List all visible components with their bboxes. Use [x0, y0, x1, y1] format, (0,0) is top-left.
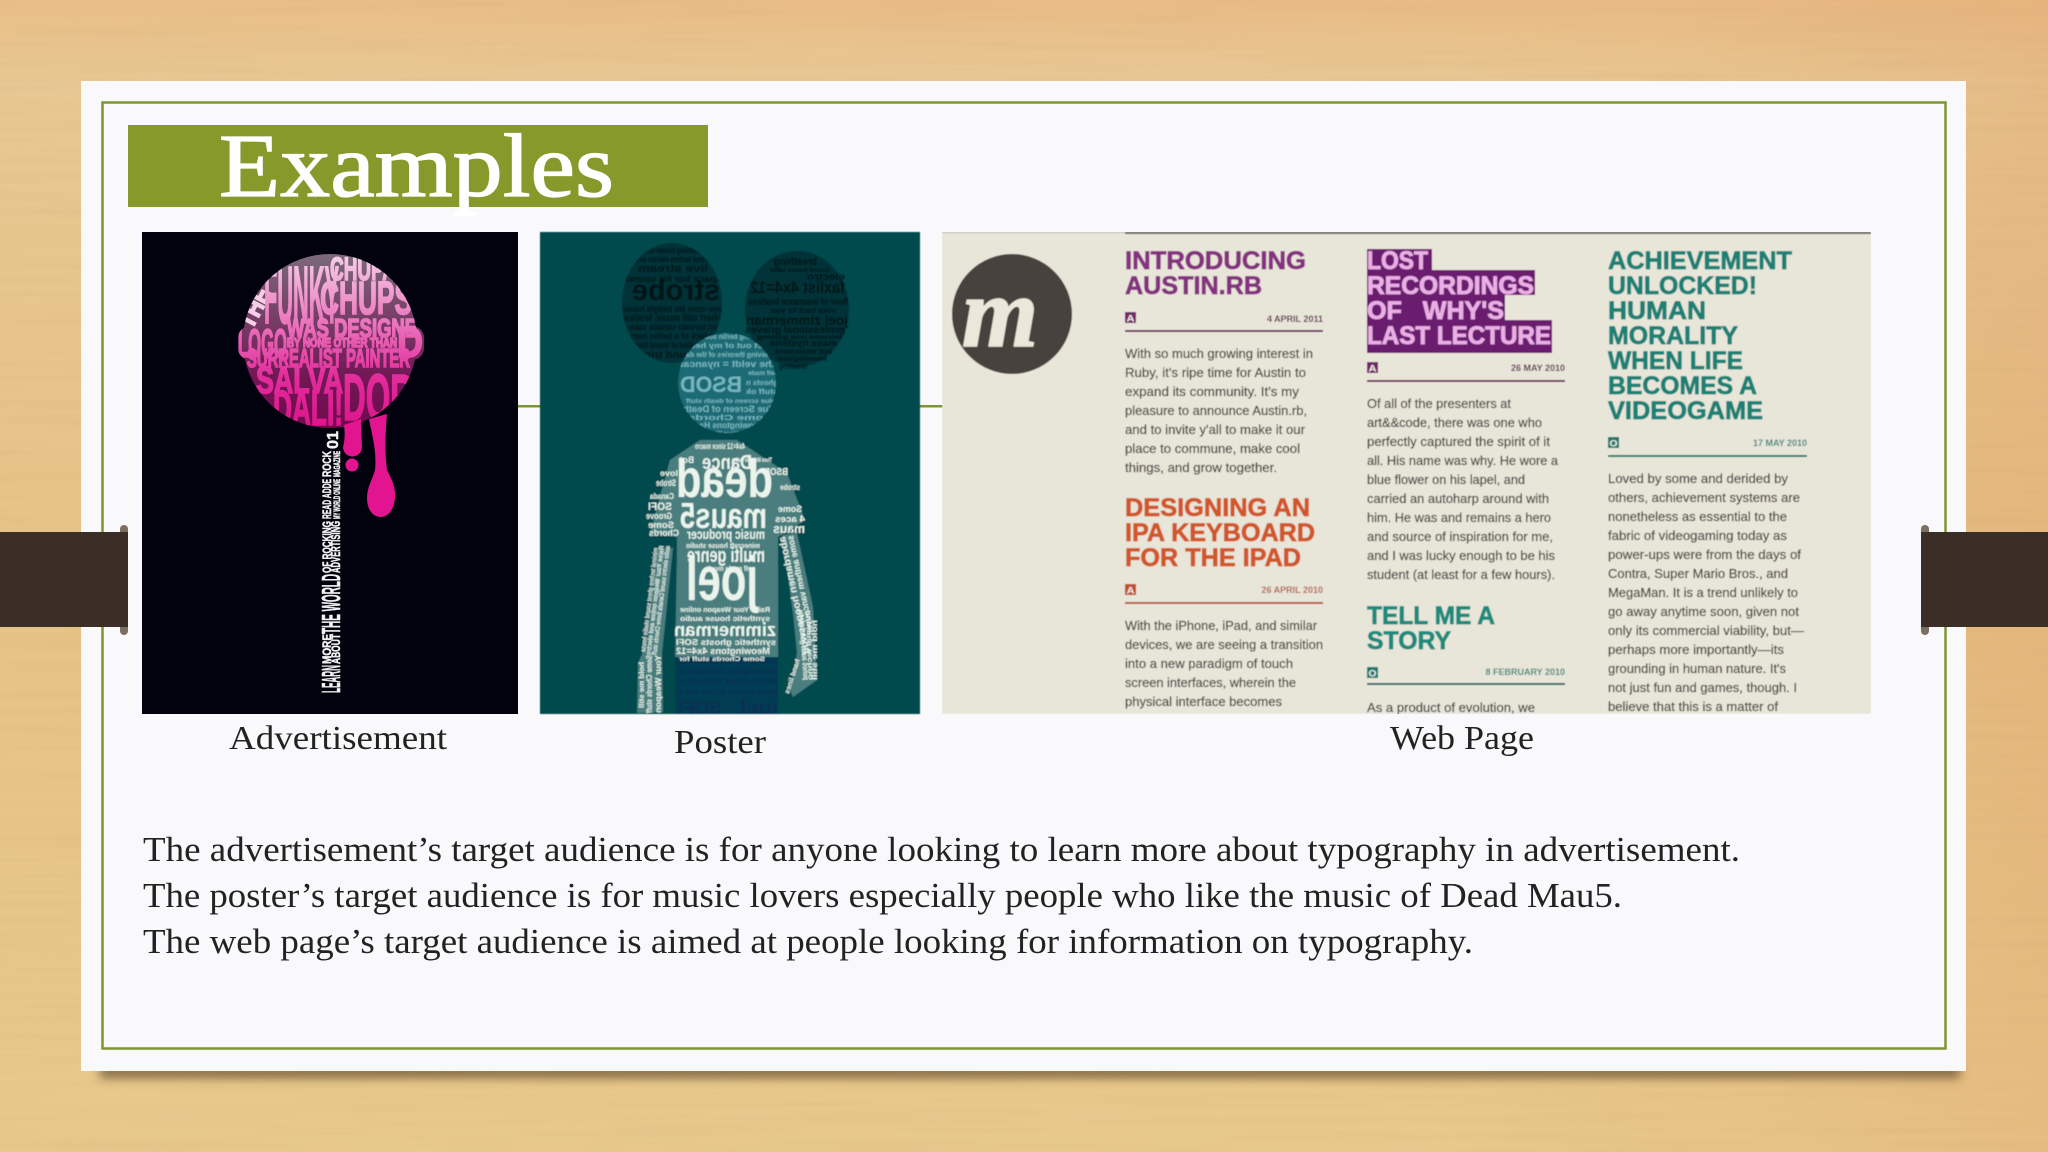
torso lettering: There Might Be Coffee: [732, 458, 772, 464]
column 1: Introducing Austin.rb: AUSTIN.RB: [1125, 272, 1262, 300]
column 3: Achievement unlocked: MORALITY: [1608, 322, 1738, 350]
torso lettering: Meowingtons 4x4=12: [676, 646, 770, 656]
torso lettering: BSOD: [764, 467, 788, 478]
column 1: Introducing Austin.rb: pleasure to announce Austin.rb,: [1125, 403, 1307, 418]
caption: advertisement: Advertisement: [229, 720, 448, 757]
torso lettering: Some Chords stuff for: [678, 657, 765, 663]
legs lettering: some chords strobe maus: [678, 686, 778, 696]
column 2: Lost recordings: blue flower on his lapel, and: [1367, 472, 1525, 487]
title: [128, 117, 708, 216]
head: moving theories of the day: [682, 352, 772, 359]
legs lettering: Meowingtons professional: [678, 666, 778, 676]
column 2: Lost recordings: 26 MAY 2010: [1511, 363, 1565, 373]
left ear: >hert still music festival: [622, 313, 722, 324]
right ear: mass hysteria: [769, 338, 837, 348]
column 3: Achievement unlocked: MegaMan. It is a trend unlikely to: [1608, 585, 1798, 600]
legs lettering: [676, 658, 778, 714]
column 1: Designing an IPA keyboard: [1125, 494, 1323, 709]
head: Some Chords: [688, 415, 772, 422]
green frame: [102, 102, 1946, 1048]
torso lettering: self made music: [705, 566, 755, 573]
lollipop stick lettering: ABOUT: [329, 634, 343, 664]
lollipop head lettering: CHUPA: [330, 251, 396, 287]
caption: poster: Poster: [674, 724, 767, 761]
sleeves and arms lettering: hoopes wolf some sound: [796, 610, 810, 680]
legs lettering: SOFI: [678, 698, 722, 718]
sleeves and arms lettering: audio electro sound Canada Some Chords stuff: [652, 545, 672, 656]
torso lettering: maus5: [680, 495, 767, 536]
caption: web page: Web Page: [1390, 720, 1534, 757]
column 1: Designing an IPA keyboard: FOR THE IPAD: [1125, 544, 1301, 572]
head: Blue Screen of Death: [683, 404, 778, 414]
legs lettering: some sound steps deadmau5: [678, 656, 778, 666]
sleeves and arms lettering: Your Weapon: [654, 655, 663, 713]
column 3: Achievement unlocked: WHEN LIFE: [1608, 347, 1743, 375]
column 2: Lost recordings: perfectly captured the spirit of it: [1367, 434, 1550, 449]
sleeves and arms lettering: minimal techno ghost sound studio house: [640, 547, 660, 653]
right ear: become one gaming: [757, 335, 842, 341]
column 3: Achievement unlocked: perhaps more importantly—its: [1608, 642, 1784, 657]
column 3: Achievement unlocked: not just fun and games, though. I: [1608, 680, 1797, 695]
head: blue screen of death stuff: [685, 399, 776, 405]
lollipop head lettering: DOR: [343, 360, 413, 434]
column 2: Tell me a story: TELL ME A: [1367, 602, 1495, 630]
connector line behind images: [510, 405, 950, 408]
paint drips: [343, 414, 395, 517]
column 3: Achievement unlocked: [1608, 247, 1807, 714]
sleeves and arms lettering: hold me still: [639, 662, 646, 708]
column 1: Designing an IPA keyboard: devices, we are seeing a transition: [1125, 637, 1323, 652]
right ear: professional grieves: [745, 325, 845, 336]
sleeves and arms lettering: some anthem vancouver: [785, 535, 816, 635]
column 2: Lost recordings: [1367, 247, 1565, 582]
left ear: space bar hit sound: [626, 274, 722, 284]
column 1: Introducing Austin.rb: With so much growing interest in: [1125, 346, 1313, 361]
description text: [143, 830, 1740, 961]
torso lettering: 4x4=12 since macro: [695, 442, 745, 451]
right dark tab: [1921, 525, 2048, 635]
column 2: Lost recordings: and source of inspiration for me,: [1367, 529, 1553, 544]
column 2: Lost recordings: him. He was and remains a hero: [1367, 510, 1551, 525]
torso lettering: Raise Your Weapon online: [680, 607, 770, 614]
column 2: Lost recordings: RECORDINGS: [1367, 272, 1534, 300]
column 1: Designing an IPA keyboard: 26 APRIL 2010: [1261, 585, 1323, 595]
sleeves and arms lettering: Some: [778, 504, 802, 514]
column 2: Lost recordings: LOST: [1367, 247, 1428, 275]
white slide panel: [81, 81, 1966, 1071]
lollipop head lettering: [238, 254, 424, 428]
right ear: joel zimmerman: [746, 312, 849, 328]
left dark tab: [0, 525, 128, 635]
description text: The web page’s target audience is aimed at people looking for information on typography.: [143, 922, 1473, 961]
lollipop stick lettering: MY WORLD ONLINE: [332, 479, 342, 519]
left ear: for lack of a better name: [626, 331, 720, 341]
torso lettering: synthetic house audio: [680, 616, 770, 623]
sleeves and arms lettering: hold me still: [812, 620, 819, 680]
column 1: Designing an IPA keyboard: physical interface becomes: [1125, 694, 1282, 709]
column 1: Introducing Austin.rb: A: [1126, 314, 1135, 324]
left ear: girl toronto canada stance: [622, 322, 720, 332]
sleeves and arms lettering: Groove: [646, 511, 672, 521]
right ear: floor of insurance beatless: [748, 297, 848, 308]
column 3: Achievement unlocked: only its commercial viability, but—: [1608, 623, 1804, 638]
column 1: Introducing Austin.rb: expand its community. It's my: [1125, 384, 1300, 399]
panel: web page: [942, 232, 1871, 715]
lollipop stick lettering: ADVERTISING: [328, 521, 343, 573]
column 3: Achievement unlocked: others, achievement systems are: [1608, 490, 1800, 505]
title: Examples: [219, 117, 614, 216]
sleeves and arms lettering: 4 aces: [775, 514, 805, 524]
lollipop head lettering: SURREALIST PAINTER: [247, 343, 410, 373]
column 3: Achievement unlocked: BECOMES A: [1608, 372, 1757, 400]
right ear: Meowingtons: [777, 356, 827, 363]
column 3: Achievement unlocked: 17 MAY 2010: [1753, 438, 1807, 448]
lollipop head lettering: D: [397, 318, 423, 367]
sleeves and arms lettering: Raise Your Weapon online and electro: [646, 545, 666, 655]
column 1: Introducing Austin.rb: Ruby, it's ripe time for Austin to: [1125, 365, 1306, 380]
left ear: strobe: [632, 274, 720, 307]
lollipop head lettering: LOGO: [238, 322, 287, 366]
head: BSOD: [680, 372, 742, 397]
torso lettering: joel: [686, 545, 759, 614]
head: faxing berlin sound: [696, 334, 760, 341]
column 3: Achievement unlocked: go away anytime soon, given not: [1608, 604, 1799, 619]
lollipop stick lettering: OF ROCKING: [320, 521, 334, 573]
torso lettering: [674, 442, 788, 663]
sleeves and arms lettering: Some Chords stuff: [645, 655, 654, 713]
column 3: Achievement unlocked: ACHIEVEMENT: [1608, 247, 1792, 275]
head: ghosts n: [746, 380, 778, 387]
column 2: Tell me a story: As a product of evolution, we: [1367, 700, 1535, 715]
lollipop stick lettering: THE WORLD: [316, 574, 346, 634]
column 3: Achievement unlocked: HUMAN: [1608, 297, 1706, 325]
lollipop stick lettering: MORE: [320, 634, 334, 664]
column 1: Designing an IPA keyboard: into a new paradigm of touch: [1125, 656, 1293, 671]
column 2: Tell me a story: O: [1368, 668, 1376, 678]
sleeves and arms lettering: SOFI: [648, 501, 672, 513]
sleeves and arms lettering: love: [659, 469, 678, 478]
lollipop stick lettering: 01: [325, 431, 342, 449]
right ear: sound tracks label: [770, 268, 830, 274]
column 3: Achievement unlocked: O: [1610, 438, 1618, 448]
column 2: Lost recordings: Of all of the presenters at: [1367, 396, 1511, 411]
description text: The advertisement’s target audience is for anyone looking to learn more about typography in advertisement.: [143, 830, 1740, 869]
column 2: Lost recordings: student (at least for a few hours).: [1367, 567, 1555, 582]
head: act out of my head: [684, 343, 768, 350]
column 1: Introducing Austin.rb: place to commune, make cool: [1125, 441, 1300, 456]
column 2: Lost recordings: carried an autoharp around with: [1367, 491, 1549, 506]
head: self made: [747, 371, 778, 377]
column 3: Achievement unlocked: Loved by some and derided by: [1608, 471, 1788, 486]
column 1: Designing an IPA keyboard: screen interfaces, wherein the: [1125, 675, 1296, 690]
sleeves and arms lettering: maus: [773, 521, 805, 536]
paper shadow: [100, 1066, 1960, 1078]
head: Meowingtons Hax: [694, 421, 765, 430]
column 3: Achievement unlocked: power-ups were from the days of: [1608, 547, 1801, 562]
column 2: Lost recordings: OF WHY'S: [1367, 297, 1504, 325]
left ear: sound trip: [644, 350, 700, 361]
lollipop stick lettering: [316, 431, 346, 693]
left ear: [622, 243, 722, 363]
lollipop stick lettering: MAGAZINE: [332, 451, 342, 477]
column 1: Introducing Austin.rb: things, and grow together.: [1125, 460, 1277, 475]
column 2: Tell me a story: STORY: [1367, 627, 1451, 655]
left ear: one more life tonight house: [622, 304, 722, 314]
column 2: Lost recordings: A: [1368, 364, 1377, 374]
column 2: Tell me a story: [1367, 602, 1565, 715]
column 2: Lost recordings: and I was lucky enough to be his: [1367, 548, 1555, 563]
column 2: Lost recordings: LAST LECTURE: [1367, 322, 1551, 350]
sleeves and arms lettering: Strobe: [656, 478, 676, 488]
logo badge: m: [962, 257, 1038, 368]
torso lettering: multi genre: [687, 545, 765, 567]
torso lettering: dead: [676, 449, 773, 509]
left ear: some kind of sound track: [631, 340, 712, 350]
column 1: Introducing Austin.rb: and to invite y'all to make it our: [1125, 422, 1306, 437]
column 2: Lost recordings: all. His name was why. He wore a: [1367, 453, 1559, 468]
sleeves and arms lettering: abordamen hoopeswolf: [777, 535, 813, 656]
sleeves and arms lettering: [639, 469, 819, 713]
right ear: [745, 251, 849, 371]
column 3: Achievement unlocked: fabric of videogaming today as: [1608, 528, 1788, 543]
column 3: Achievement unlocked: UNLOCKED!: [1608, 272, 1757, 300]
torso lettering: music producer: [687, 526, 765, 542]
column 1: Designing an IPA keyboard: IPA KEYBOARD: [1125, 519, 1315, 547]
column 1: Introducing Austin.rb: [1125, 247, 1323, 475]
sleeves and arms lettering: Chords: [649, 528, 679, 538]
lollipop head lettering: SALVA: [256, 360, 343, 402]
head: the veldt = nyancat: [680, 359, 775, 369]
lollipop head lettering: FUNKY: [264, 250, 339, 341]
column 3: Achievement unlocked: grounding in human nature. It's: [1608, 661, 1786, 676]
right ear: bot movement: [775, 347, 832, 356]
head: stuff ok: [746, 389, 778, 396]
column 1: Introducing Austin.rb: 4 APRIL 2011: [1267, 314, 1323, 324]
column 1: Introducing Austin.rb: INTRODUCING: [1125, 247, 1306, 275]
lollipop stick lettering: ROCK: [320, 451, 334, 477]
right ear: breathing: [774, 256, 817, 268]
column 3: Achievement unlocked: nonetheless as essential to the: [1608, 509, 1787, 524]
torso lettering: zimmerman: [674, 620, 776, 640]
lollipop head lettering: CHUPS: [320, 272, 412, 324]
left ear: live stream: [638, 263, 708, 275]
body silhouette tone: [637, 440, 817, 713]
torso lettering: minecraft house studio: [686, 543, 760, 550]
left ear: breathing house sound: [636, 246, 706, 255]
torso lettering: synthetic ghosts SOFI: [676, 638, 776, 647]
legs lettering: joel: [740, 697, 779, 719]
column 1: Designing an IPA keyboard: With the iPhone, iPad, and similar: [1125, 618, 1318, 633]
left ear: minimal techno electro sound: [628, 255, 716, 264]
lollipop stick lettering: READ ADDE: [320, 479, 334, 519]
column 3: Achievement unlocked: believe that this is a matter of: [1608, 699, 1778, 714]
right ear: breathing: [779, 362, 807, 371]
lollipop stick lettering: LEARN: [316, 665, 346, 693]
legs lettering: electro house label music: [678, 676, 778, 686]
sleeves and arms lettering: strobe: [780, 483, 800, 492]
column 1: Designing an IPA keyboard: DESIGNING AN: [1125, 494, 1310, 522]
column 2: Tell me a story: 8 FEBRUARY 2010: [1485, 667, 1565, 677]
lollipop head lettering: WAS DESIGNE: [287, 313, 417, 343]
logo badge: [952, 254, 1072, 374]
torso lettering: Dance: [702, 452, 752, 474]
head: [678, 333, 778, 438]
torso lettering: Bot: [680, 455, 694, 465]
column 2: Lost recordings: art&&code, there was one who: [1367, 415, 1542, 430]
panel: advertisement lollipop: [142, 232, 518, 714]
sleeves and arms lettering: Canada: [650, 492, 674, 501]
head: Raise Your Weapon: [697, 431, 757, 438]
panel: poster figure: [540, 232, 920, 719]
right ear: electro: [807, 272, 845, 283]
right ear: voice track for your: [770, 306, 836, 315]
sleeves and arms lettering: hand lines: [784, 658, 802, 695]
lollipop head lettering: THE: [233, 283, 277, 333]
column 1: Designing an IPA keyboard: A: [1126, 586, 1135, 596]
sleeves and arms lettering: Some: [648, 520, 674, 530]
column 3: Achievement unlocked: Contra, Super Mario Bros., and: [1608, 566, 1788, 581]
sleeves and arms lettering: minimal techno: [805, 610, 814, 680]
right ear: faxlist 4x4=12: [750, 278, 845, 297]
lollipop head lettering: DALI!: [273, 380, 343, 436]
description text: The poster’s target audience is for music lovers especially people who like the music of Dead Mau5.: [143, 876, 1622, 915]
column 3: Achievement unlocked: VIDEOGAME: [1608, 397, 1763, 425]
lollipop head lettering: BY NONE OTHER THAN: [287, 335, 397, 350]
